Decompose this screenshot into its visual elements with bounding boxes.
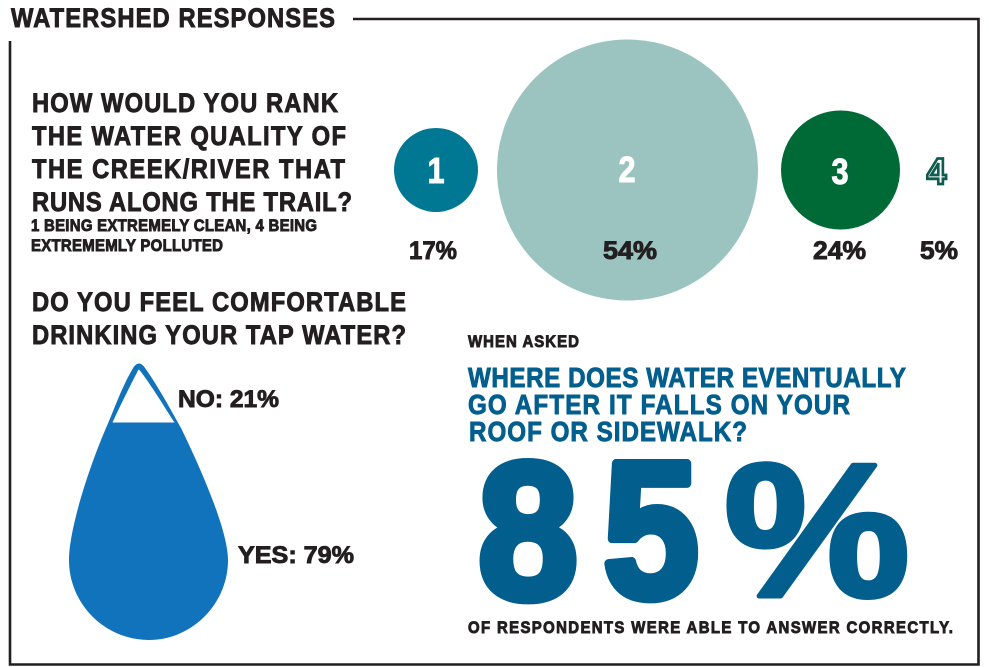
caption: OF RESPONDENTS WERE ABLE TO ANSWER CORRECTLY. (468, 619, 953, 637)
bubble: rank 2 (497, 40, 758, 300)
big number: 85%: 8 (478, 423, 578, 640)
question: water quality ranking: THE WATER QUALITY OF (32, 122, 346, 151)
percent labels: 5% (920, 237, 958, 265)
question: tap water (32, 288, 406, 350)
ranking scale note (31, 217, 317, 255)
percent labels: 54% (603, 237, 657, 265)
label: no: NO: 21% (178, 386, 279, 413)
percent labels: 24% (813, 237, 866, 265)
bubble: rank 3 (781, 110, 900, 230)
question: where does water go: WHERE DOES WATER EVENTUALLY (468, 364, 906, 393)
percent labels: 17% (409, 237, 457, 265)
bubble: rank 4: 4 (927, 150, 946, 192)
big number: 85%: % (724, 425, 910, 637)
question: where does water go (468, 364, 906, 447)
bubble: rank 1 (394, 128, 478, 212)
question: where does water go: ROOF OR SIDEWALK? (469, 418, 747, 447)
ranking scale note: 1 BEING EXTREMELY CLEAN, 4 BEING (31, 217, 317, 235)
label: yes: YES: 79% (238, 542, 354, 569)
intro: when asked: WHEN ASKED (468, 333, 579, 351)
bubble: rank 2: 2 (618, 151, 636, 191)
question: water quality ranking: THE CREEK/RIVER THAT (32, 155, 345, 184)
percent labels (409, 237, 958, 265)
question: tap water: DRINKING YOUR TAP WATER? (32, 321, 406, 350)
question: tap water: DO YOU FEEL COMFORTABLE (32, 288, 406, 317)
big number: 85% (478, 422, 910, 640)
ranking scale note: EXTREMEMLY POLLUTED (31, 237, 223, 255)
title: WATERSHED RESPONSES (11, 4, 335, 33)
bubble: rank 3: 3 (831, 153, 849, 193)
icon: water drop chart (69, 364, 228, 640)
big number: 85%: 5 (603, 422, 699, 639)
question: where does water go: GO AFTER IT FALLS ON YOUR (468, 391, 850, 420)
question: water quality ranking: HOW WOULD YOU RANK (32, 89, 339, 118)
bubble: rank 1: 1 (427, 152, 445, 192)
question: water quality ranking: RUNS ALONG THE TRAIL? (32, 188, 352, 217)
question: water quality ranking (32, 89, 352, 217)
